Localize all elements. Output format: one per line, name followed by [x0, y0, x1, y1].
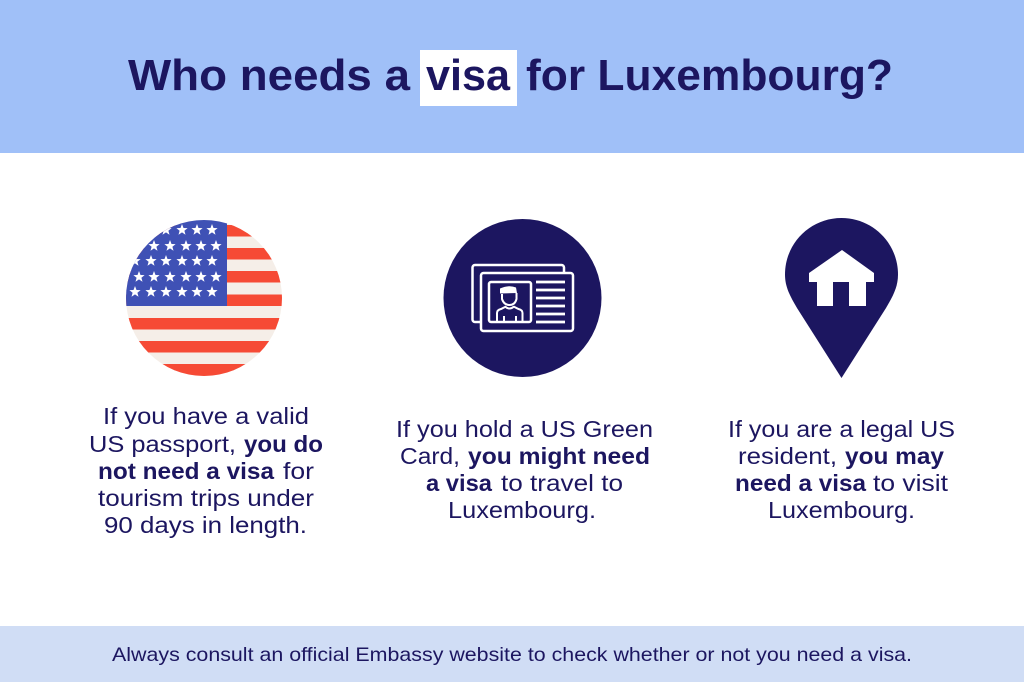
text block: US passport: not need a visa — [98, 458, 274, 484]
text block: legal resident: If you are a legal US — [728, 416, 955, 442]
text block: US passport: US passport, — [89, 431, 236, 457]
text block: Green Card: a visa — [426, 470, 492, 496]
footer band — [0, 626, 1024, 682]
text block: legal resident: you may — [845, 443, 944, 469]
text block: US passport: for — [283, 458, 314, 484]
text block: US passport: If you have a valid — [103, 403, 309, 429]
text block: legal resident — [728, 416, 955, 523]
title — [128, 50, 893, 106]
icon: ID card in circle — [444, 219, 602, 377]
footer note: Always consult an official Embassy website to check whether or not you need a visa. — [112, 644, 912, 666]
text block: US passport: you do — [244, 431, 323, 457]
text block: legal resident: resident, — [738, 443, 837, 469]
title: visa — [426, 51, 511, 100]
text block: Green Card — [396, 416, 653, 523]
text block: US passport: tourism trips under — [98, 485, 314, 511]
text block: Green Card: to travel to — [501, 470, 623, 496]
text block: Green Card: If you hold a US Green — [396, 416, 653, 442]
text block: legal resident: to visit — [873, 470, 949, 496]
text block: legal resident: need a visa — [735, 470, 866, 496]
text block: Green Card: Card, — [400, 443, 460, 469]
icon: US flag — [126, 220, 282, 376]
text block: Green Card: Luxembourg. — [448, 497, 596, 523]
text block: US passport: 90 days in length. — [104, 512, 307, 538]
title: for Luxembourg? — [526, 51, 893, 100]
text block: Green Card: you might need — [468, 443, 650, 469]
text block: legal resident: Luxembourg. — [768, 497, 915, 523]
header band — [0, 0, 1024, 153]
title: Who needs a — [128, 51, 411, 100]
text block: US passport — [89, 403, 323, 538]
icon: home location pin — [785, 218, 898, 378]
